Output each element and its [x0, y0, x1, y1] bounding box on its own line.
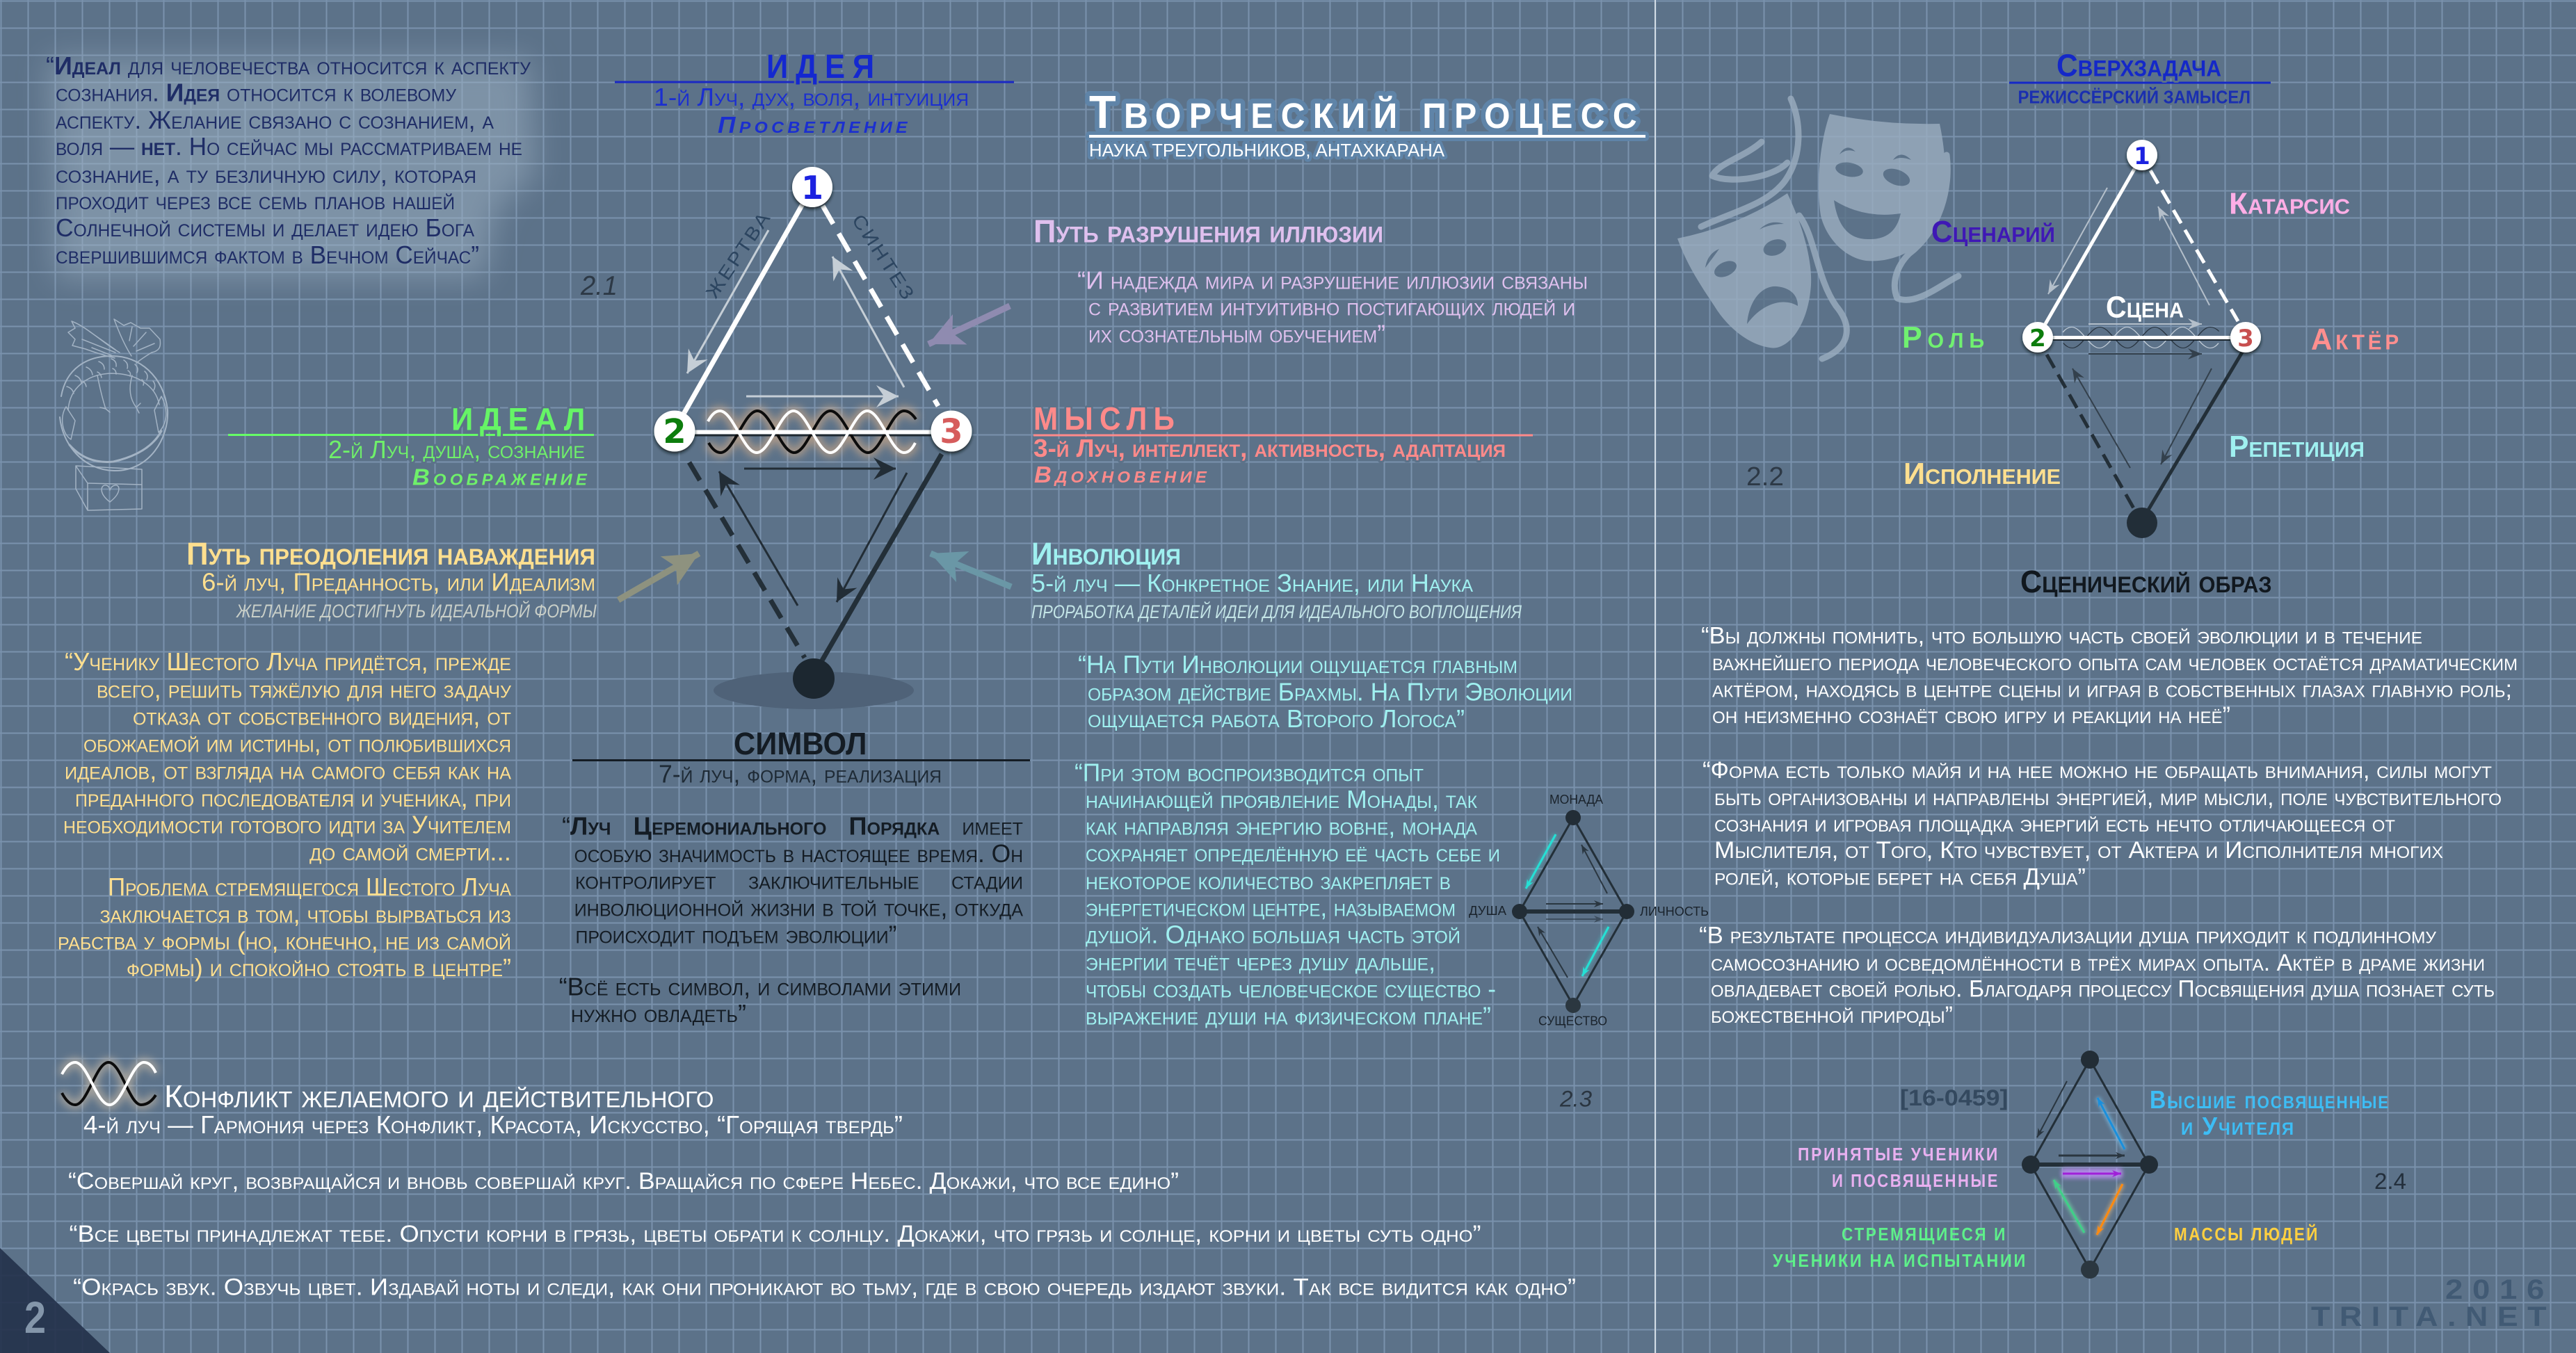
labels of diagram 2.2: Катарсис [2229, 186, 2350, 221]
heading: ideal [228, 402, 594, 489]
heading: thought: 3-й Луч, интеллект, активность, адаптация [1033, 434, 1506, 462]
paragraph: individualization: “В результате процесса индивидуализации душа приходит к подлинному [1699, 922, 2437, 948]
labels of diagram 2.2: Сценический образ [2020, 564, 2271, 599]
quote: all is symbol [559, 973, 961, 1028]
quote: ceremonial order: особую значимость в настоящее время. Он [574, 839, 1023, 868]
quote: sixth ray: рабства у формы (но, конечно, не из самой [58, 927, 511, 955]
quote: sixth ray: обожаемой им истины, от полюбившихся [83, 729, 511, 758]
corner page tab [0, 1248, 110, 1353]
quote: sixth ray: идеалов, от взгляда на самого себя как на [65, 756, 511, 785]
heading: superobjective: Сверхзадача [2056, 48, 2221, 83]
panel: path of destroying illusion: Путь разрушения иллюзии [1033, 213, 1383, 249]
label: synthesis: СИНТЕЗ [848, 211, 919, 305]
credit: year and site: TRITA.NET [2311, 1302, 2556, 1332]
quote: ceremonial order: контролирует заключительные стадии [575, 866, 1023, 894]
credit: year and site: 2016 [2445, 1274, 2554, 1305]
arrows around the triangle [687, 230, 907, 606]
quote: involution: ощущается работа Второго Логоса” [1088, 704, 1465, 733]
quote: monad: сохраняет определённую её часть себе и [1086, 838, 1500, 867]
quote: monad: выражение души на физическом плане” [1086, 1001, 1491, 1030]
paragraph: individualization: божественной природы” [1711, 1002, 1953, 1028]
paragraph: form: “Форма есть только майя и на нее можно не обращать внимания, силы могут [1702, 757, 2492, 784]
arrow: involution pointer [931, 553, 1011, 587]
node: stage image [2127, 508, 2157, 538]
paragraph: form: Мыслителя, от Того, Кто чувствует, от Актера и Исполнителя многих [1714, 837, 2443, 864]
quote: ideal: проходит через все семь планов нашей [56, 186, 455, 215]
panel: involution [1031, 536, 1572, 1030]
quote: sixth ray: Проблема стремящегося Шестого Луча [108, 873, 511, 901]
diagram 2.2: theatre triangle [2022, 140, 2261, 538]
panel: conflict [62, 1062, 1576, 1301]
quote: sixth ray: “Ученику Шестого Луча придётся, прежде [65, 647, 511, 676]
labels of diagram 2.4: Высшие посвященные [2150, 1085, 2390, 1114]
page number: 2 [24, 1293, 46, 1343]
diagram 2.3: monad soul personality: ЛИЧНОСТЬ [1640, 905, 1709, 918]
node 2: 2 [2029, 325, 2046, 353]
quote: illusion [1077, 266, 1588, 348]
node 2: 2 [663, 412, 686, 451]
quote: all is symbol: нужно овладеть” [571, 999, 746, 1028]
icon: ouroboros dragon [60, 319, 168, 510]
quote: monad: энергии течёт через душу дальше, [1086, 947, 1435, 976]
quotes: actor [1699, 622, 2518, 1028]
figure number 2.1: 2.1 [580, 271, 618, 301]
panel: symbol [559, 726, 1030, 1028]
paragraph: evolution: важнейшего периода человеческого опыта сам человек остаётся драматическим [1712, 649, 2518, 676]
labels of diagram 2.2: Репетиция [2229, 430, 2365, 464]
quote: monad: некоторое количество закрепляет в [1086, 866, 1451, 895]
figure number 2.2: 2.2 [1746, 462, 1784, 492]
paragraph: evolution: он неизменно сознаёт свою игру и реакции на неё” [1712, 702, 2230, 729]
quotes: conflict [68, 1168, 1576, 1301]
sad mask face [1705, 222, 1798, 324]
quote: illusion: их сознательным обучением” [1088, 320, 1385, 348]
quote: involution: “На Пути Инволюции ощущается главным [1078, 650, 1518, 679]
quote: involution [1078, 650, 1572, 733]
diagram 2.3: monad soul personality [1469, 793, 1709, 1028]
quote: sixth ray: преданного последователя и ученика, при [75, 784, 511, 812]
labels of diagram 2.4: и Учителя [2181, 1112, 2295, 1140]
labels of diagram 2.4: И ПОСВЯЩЕННЫЕ [1832, 1170, 1999, 1191]
paragraph: individualization: овладевает своей ролью. Благодаря процессу Посвящения душа познает суть [1711, 976, 2495, 1003]
quote: monad: “При этом воспроизводится опыт [1074, 758, 1424, 786]
quote: ceremonial order: происходит подъем эволюции” [576, 921, 897, 948]
panel: symbol: 7-й луч, форма, реализация [659, 759, 942, 788]
node 3 [931, 410, 972, 452]
heading: thought: МЫСЛЬ [1033, 400, 1181, 437]
quote: sixth ray: формы) и спокойно стоять в центре” [127, 953, 511, 982]
figure number 2.3: 2.3 [1559, 1087, 1592, 1112]
node 2 [2022, 322, 2053, 353]
quote: sixth ray: до самой смерти... [309, 837, 511, 866]
title block [1089, 86, 1645, 161]
heading: thought: Вдохновение [1034, 462, 1210, 487]
quote: ideal: Солнечной системы и делает идею Бога [56, 213, 474, 242]
heading: ideal: ИДЕАЛ [451, 402, 592, 437]
node 2 [654, 410, 695, 452]
panel: conflict: 4-й луч — Гармония через Конфликт, Красота, Искусство, “Горящая твердь” [83, 1110, 903, 1139]
quote: monad: чтобы создать человеческое существо - [1086, 975, 1496, 1003]
icon: theatre masks [1677, 99, 1958, 359]
quote: sixth ray: всего, решить тяжёлую для него задачу [97, 674, 511, 704]
heading: superobjective [2009, 48, 2271, 108]
quote: ceremonial order [562, 812, 1023, 948]
quote: ideal: сознание, а ту безличную силу, которая [56, 160, 476, 188]
heading: thought [1033, 400, 1533, 487]
diagram 2.1: main triangle of rays [654, 167, 972, 709]
node 3: 3 [940, 412, 963, 451]
quote: sixth ray [58, 647, 511, 982]
labels of diagram 2.4: 2.4 [2374, 1169, 2406, 1194]
diagram 2.3: monad soul personality: МОНАДА [1549, 793, 1603, 807]
quote: illusion: с развитием интуитивно постигающих людей и [1088, 293, 1575, 321]
labels of diagram 2.4: СТРЕМЯЩИЕСЯ И [1842, 1224, 2007, 1245]
quote: monad: начинающей проявление Монады, так [1086, 785, 1477, 813]
title block: ТВОРЧЕСКИЙ ПРОЦЕСС [1089, 86, 1645, 138]
panel: conflict: Конфликт желаемого и действительного [164, 1079, 714, 1115]
quote: ideal [46, 51, 536, 278]
heading: ideal: 2-й Луч, душа, сознание [328, 435, 585, 464]
panel: path of overcoming glamour [58, 536, 597, 982]
credit: year and site [2311, 1274, 2556, 1332]
quote: involution: образом действие Брахмы. На Пути Эволюции [1088, 677, 1572, 706]
happy mask face [1834, 147, 1913, 239]
labels of diagram 2.4: [16-0459] [1900, 1085, 2009, 1110]
quote: monad: энергетическом центре, называемом [1086, 893, 1456, 922]
labels of diagram 2.2: Исполнение [1903, 457, 2061, 491]
heading: ideal: Воображение [412, 464, 590, 489]
labels of diagram 2.2: Роль [1902, 321, 1990, 355]
paragraph: form: быть организованы и направлены энергией, мир мысли, поле чувствительного [1714, 784, 2502, 811]
icon: intertwined waves [62, 1062, 156, 1105]
arrow: glamour path pointer [618, 553, 699, 600]
quote: monad: как направляя энергию вовне, монада [1086, 812, 1477, 840]
node 1 [792, 167, 832, 207]
diagram 2.3: monad soul personality: СУЩЕСТВО [1538, 1014, 1607, 1028]
paragraph: individualization [1699, 922, 2495, 1028]
node: symbol [793, 658, 835, 699]
quote: sixth ray: заключается в том, чтобы вырваться из [100, 900, 511, 928]
diagram 2.3: monad soul personality: ДУША [1469, 904, 1506, 918]
quote: illusion: “И надежда мира и разрушение иллюзии связаны [1077, 266, 1588, 295]
quote: ideal: аспекту. Желание связано с сознанием, а [56, 106, 494, 134]
panel: involution: Инволюция [1031, 536, 1181, 572]
panel: path of overcoming glamour: Путь преодоления наваждения [186, 536, 595, 572]
panel: path of overcoming glamour: ЖЕЛАНИЕ ДОСТИГНУТЬ ИДЕАЛЬНОЙ ФОРМЫ [235, 599, 597, 622]
labels of diagram 2.2: Сцена [2106, 291, 2184, 325]
labels of diagram 2.2: Актёр [2311, 323, 2402, 357]
quotes: conflict: “Совершай круг, возвращайся и вновь совершай круг. Вращайся по сфере Небес. Докажи, что все едино” [68, 1168, 1179, 1194]
stage waves [2063, 327, 2219, 348]
label: sacrifice: ЖЕРТВА [702, 206, 775, 302]
node 3: 3 [2237, 325, 2254, 353]
happy mask [1819, 114, 1945, 261]
arrow: illusion path pointer [928, 306, 1010, 344]
labels of diagram 2.4: УЧЕНИКИ НА ИСПЫТАНИИ [1773, 1250, 2027, 1271]
quote: ceremonial order: “Луч Церемониального Порядка имеет [562, 812, 1023, 841]
paragraph: form: сознания и игровая площадка энергий есть нечто отличающееся от [1714, 811, 2395, 837]
quote: monad [1074, 758, 1500, 1030]
glowing arrows [2054, 1098, 2125, 1235]
quote: ideal: сознания. Идея относится к волевому [56, 78, 456, 107]
paragraph: evolution: “Вы должны помнить, что большую часть своей эволюции и в течение [1701, 622, 2422, 649]
quote: sixth ray: отказа от собственного видения, от [133, 702, 511, 731]
quotes: conflict: “Окрась звук. Озвучь цвет. Издавай ноты и следи, как они проникают во тьму, где в свою очередь издают звуки. Так все видится как одно” [73, 1274, 1576, 1301]
node 1: 1 [2134, 143, 2150, 170]
quote: ceremonial order: инволюционной жизни в той точке, откуда [574, 893, 1023, 922]
panel: path of destroying illusion [1033, 213, 1588, 348]
heading: idea: ИДЕЯ [766, 49, 882, 86]
heading: idea: 1-й Луч, дух, воля, интуиция [654, 83, 969, 111]
paragraph: evolution: актёром, находясь в центре сцены и играя в собственных глазах главную роль; [1712, 676, 2512, 702]
heading: superobjective: РЕЖИССЁРСКИЙ ЗАМЫСЕЛ [2018, 87, 2251, 108]
paragraph: form [1702, 757, 2502, 890]
node 1: 1 [801, 169, 823, 206]
quote: ideal: воля — нет. Но сейчас мы рассматриваем не [56, 132, 522, 161]
cyan energy arrows [1526, 834, 1609, 976]
quote: ideal: “Идеал для человечества относится к аспекту [46, 51, 531, 80]
heading: idea [615, 49, 1014, 138]
node 1 [2127, 140, 2157, 170]
labels of diagram 2.2: Сценарий [1931, 215, 2055, 249]
quote: ideal: свершившимся фактом в Вечном Сейчас” [56, 241, 479, 269]
panel: involution: ПРОРАБОТКА ДЕТАЛЕЙ ИДЕИ ДЛЯ ИДЕАЛЬНОГО ВОПЛОЩЕНИЯ [1031, 600, 1522, 622]
labels of diagram 2.4: ПРИНЯТЫЕ УЧЕНИКИ [1798, 1144, 1999, 1165]
panel: involution: 5-й луч — Конкретное Знание, или Наука [1031, 569, 1473, 597]
labels of diagram 2.4: МАССЫ ЛЮДЕЙ [2174, 1224, 2319, 1245]
quotes: conflict: “Все цветы принадлежат тебе. Опусти корни в грязь, цветы обрати к солнцу. Докажи, что грязь и солнце, корни и цветы суть одно” [70, 1221, 1481, 1247]
labels of diagram 2.4 [1773, 1085, 2406, 1271]
labels of diagram 2.2 [1902, 186, 2402, 599]
diagram 2.4: humanity groups [2022, 1051, 2158, 1279]
paragraph: evolution [1701, 622, 2518, 729]
panel: path of overcoming glamour: 6-й луч, Преданность, или Идеализм [202, 567, 595, 597]
quote: sixth ray: необходимости готового идти за Учителем [63, 811, 511, 839]
paragraph: form: ролей, которые берет на себя Душа” [1714, 864, 2086, 890]
paragraph: individualization: самосознанию и осведомлённости в трёх мирах опыта. Актёр в драме жизни [1711, 950, 2485, 976]
heading: idea: Просветление [718, 112, 911, 138]
quote: monad: душой. Однако большая часть этой [1086, 921, 1460, 949]
quote: all is symbol: “Всё есть символ, и символами этими [559, 973, 961, 1001]
node 3 [2230, 322, 2261, 353]
subtitle: НАУКА ТРЕУГОЛЬНИКОВ, АНТАХКАРАНА [1089, 140, 1445, 161]
panel: symbol: СИМВОЛ [734, 726, 867, 761]
sad mask [1677, 193, 1811, 348]
